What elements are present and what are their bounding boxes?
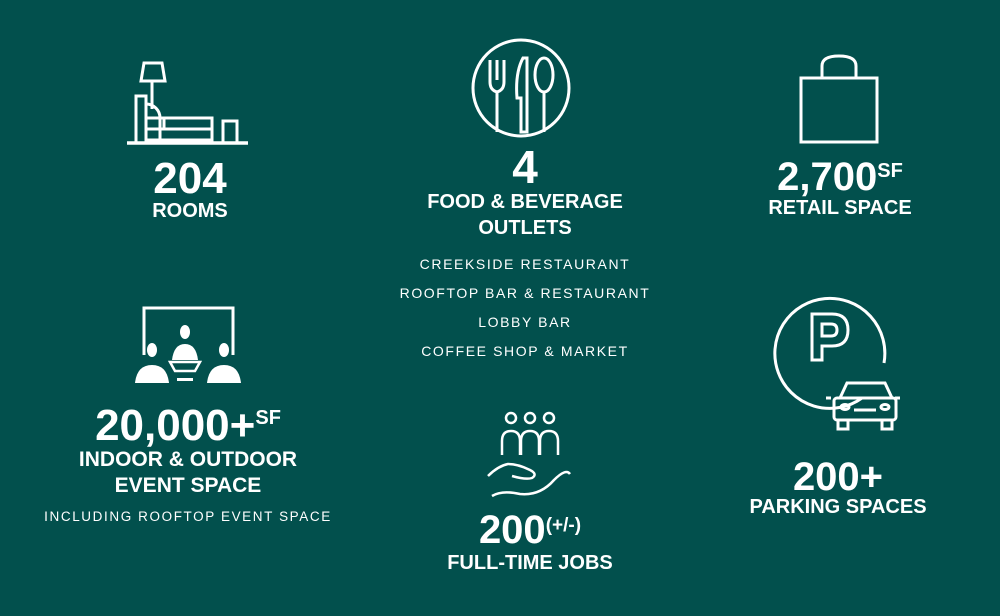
- panel: jobs: [447, 412, 613, 574]
- icon: bed with lamp: [127, 62, 248, 145]
- panel: rooms: [127, 62, 248, 222]
- icon: shopping bag: [800, 54, 878, 144]
- panel: jobs: FULL-TIME JOBS: [447, 552, 613, 574]
- icon: hand with people: [487, 412, 571, 498]
- list: outlets: LOBBY BAR: [478, 314, 572, 330]
- panel: rooms: ROOMS: [152, 200, 228, 222]
- panel: parking: PARKING SPACES: [749, 496, 927, 518]
- stat: parking: 200+: [793, 455, 883, 499]
- panel: event space: INDOOR & OUTDOOR: [79, 448, 297, 471]
- list: outlets: ROOFTOP BAR & RESTAURANT: [400, 285, 650, 301]
- list: outlets: COFFEE SHOP & MARKET: [421, 343, 629, 359]
- stat: 4 outlets: 4: [512, 141, 538, 193]
- icon: parking with car: [773, 296, 900, 430]
- stat: jobs: 200(+/-): [479, 508, 581, 552]
- panel: retail: RETAIL SPACE: [768, 197, 912, 219]
- panel: food & beverage: FOOD & BEVERAGE: [427, 191, 623, 213]
- panel: event space: INCLUDING ROOFTOP EVENT SPACE: [44, 509, 332, 524]
- stat: retail: 2,700SF: [777, 155, 903, 199]
- panel: parking: [749, 296, 927, 518]
- stat: 204 rooms: 204: [153, 154, 227, 203]
- icon: cutlery circle: [472, 38, 570, 138]
- stat: event space: 20,000+SF: [95, 401, 281, 450]
- icon: meeting: [135, 306, 241, 383]
- panel: event space: EVENT SPACE: [115, 474, 261, 497]
- list: outlets: [400, 256, 650, 359]
- panel: retail: [768, 54, 912, 219]
- list: outlets: CREEKSIDE RESTAURANT: [420, 256, 630, 272]
- panel: event space: [44, 306, 332, 524]
- panel: food & beverage: [400, 38, 650, 359]
- panel: food & beverage: OUTLETS: [478, 217, 572, 239]
